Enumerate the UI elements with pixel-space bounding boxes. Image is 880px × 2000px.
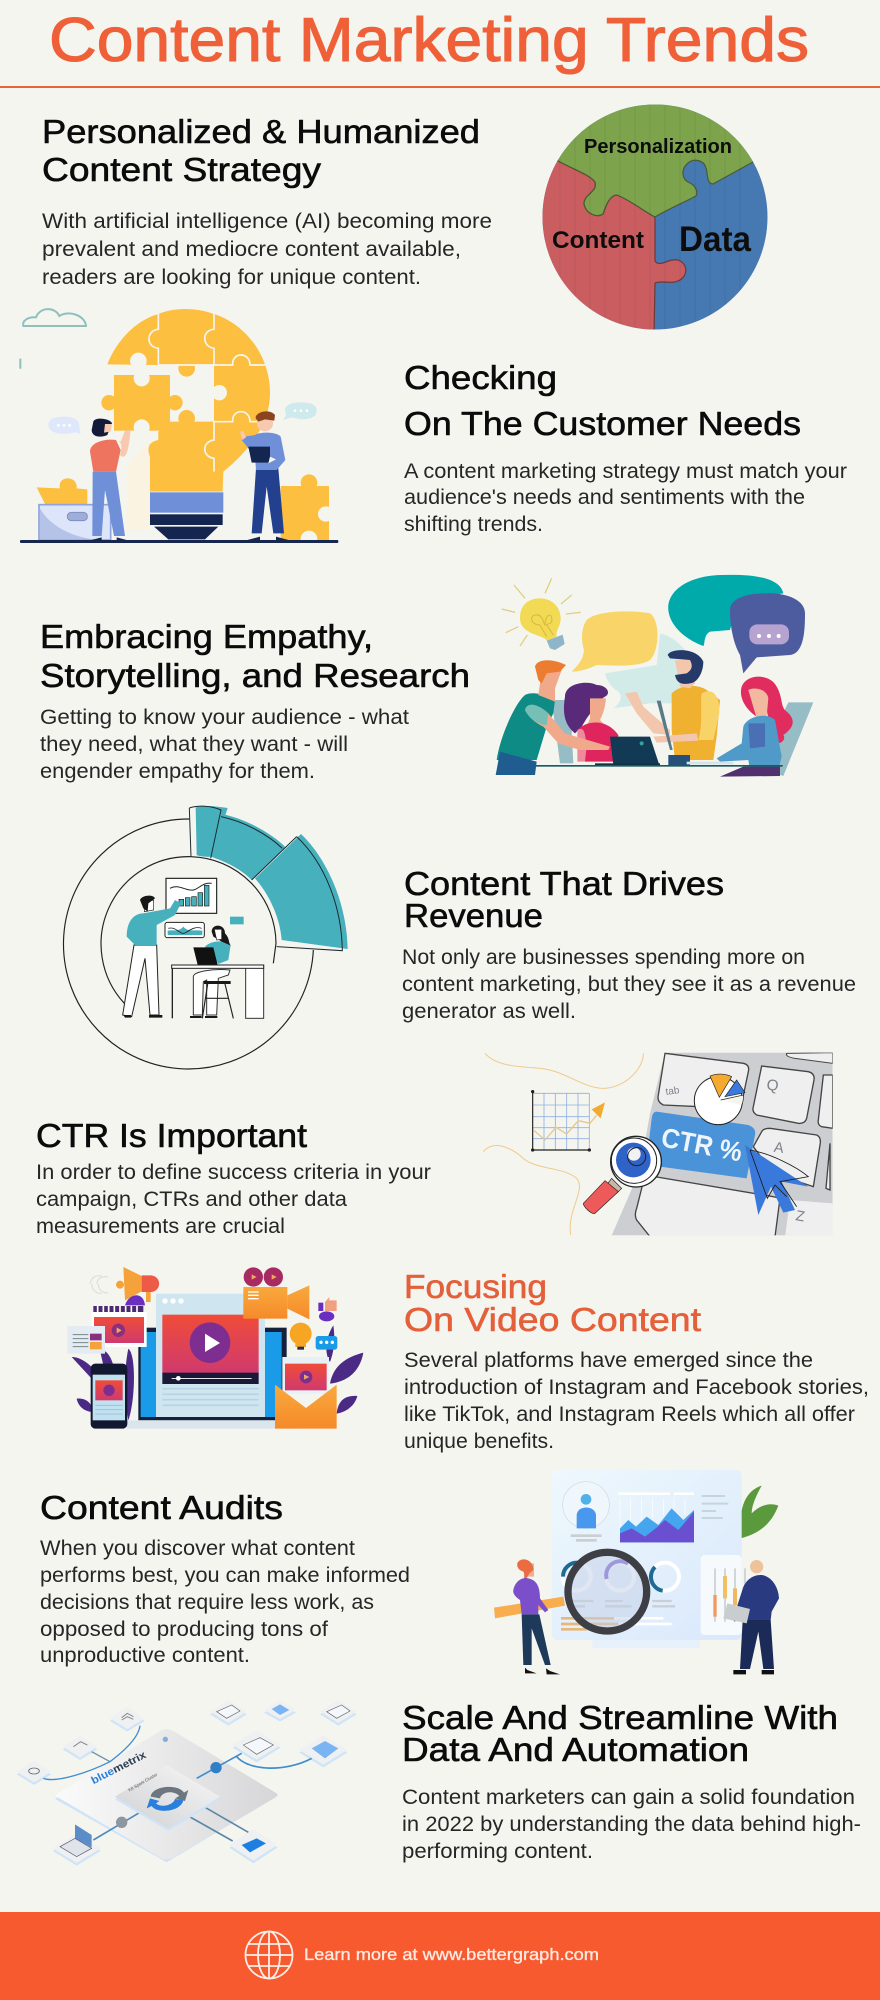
CTR key <box>648 1112 755 1178</box>
list card <box>67 1326 105 1354</box>
cloud <box>23 309 86 326</box>
video window <box>156 1294 265 1417</box>
text block: audits: decisions that require less work, as <box>40 1590 374 1614</box>
label: Personalization: Personalization <box>584 136 732 158</box>
puzzle piece right <box>281 474 333 547</box>
woman <box>513 1559 560 1674</box>
man <box>240 411 291 541</box>
text block: customer needs <box>404 459 847 536</box>
text block: scale: Content marketers can gain a solid foundation <box>402 1785 855 1809</box>
man <box>625 650 720 765</box>
video camera <box>243 1267 309 1319</box>
illustration: radial chart with analysts <box>63 806 348 1069</box>
text block: customer needs: shifting trends. <box>404 512 543 536</box>
box and folder <box>37 478 111 540</box>
illustration: content audit <box>494 1470 779 1674</box>
speech bubble left <box>48 417 81 434</box>
text block: empathy <box>40 705 409 783</box>
heading: revenue <box>404 865 724 934</box>
woman <box>193 926 231 965</box>
heading: empathy: Embracing Empathy, <box>40 618 373 655</box>
heading: CTR: CTR Is Important <box>36 1117 307 1154</box>
text block: empathy: they need, what they want - will <box>40 732 348 756</box>
gears <box>210 1762 222 1773</box>
candle chart <box>701 1555 745 1635</box>
heading: revenue: Content That Drives <box>404 865 724 902</box>
CTR label: CTR % <box>659 1121 745 1167</box>
speech bubble right <box>283 402 317 420</box>
phone <box>91 1364 127 1429</box>
sync logo <box>147 1787 188 1811</box>
chat bubble <box>316 1336 337 1350</box>
woman right <box>717 677 793 777</box>
person 2 <box>564 683 618 762</box>
table edge <box>536 765 783 767</box>
text block: revenue: Not only are businesses spending more on <box>402 945 805 969</box>
key labels: tab <box>665 1085 681 1098</box>
illustration: team discussion <box>496 575 813 777</box>
line chart <box>531 1090 605 1152</box>
heading: customer needs: Checking <box>404 359 557 396</box>
area chart <box>618 1494 728 1542</box>
plant <box>740 1486 778 1538</box>
text block: scale: performing content. <box>402 1839 593 1863</box>
play button <box>190 1322 230 1363</box>
yellow bar <box>494 1597 565 1618</box>
heading: revenue: Revenue <box>404 897 543 934</box>
illustration: CTR keyboard <box>483 1053 833 1237</box>
heading: scale: Data And Automation <box>402 1731 749 1768</box>
keyboard base <box>612 1053 833 1235</box>
text block: video <box>404 1348 869 1453</box>
heading: empathy <box>40 618 470 694</box>
label: Content: Content <box>552 227 644 254</box>
text block: audits: performs best, you can make informed <box>40 1563 410 1587</box>
text block: revenue <box>402 945 856 1023</box>
outer and inner rings <box>63 819 313 1069</box>
text block: scale <box>402 1785 861 1863</box>
pie chart <box>694 1074 745 1125</box>
illustration: data automation network <box>17 1700 357 1866</box>
text block: personalized content: readers are looking for unique content. <box>42 265 421 289</box>
heading: audits: Content Audits <box>40 1489 283 1526</box>
text block: video: like TikTok, and Instagram Reels which all offer <box>404 1402 855 1426</box>
legs and stool <box>190 970 233 1018</box>
teal bubble <box>668 575 783 646</box>
heading: video <box>404 1268 701 1338</box>
pale bubble <box>605 633 697 708</box>
text block: personalized content: prevalent and mediocre content available, <box>42 237 461 261</box>
desk <box>172 965 264 1018</box>
heading: personalized content: Content Strategy <box>42 151 322 188</box>
cube icons <box>29 1704 350 1857</box>
heading: personalized content: Personalized & Humanized <box>42 113 480 150</box>
text block: personalized content <box>42 209 492 289</box>
text block: personalized content: With artificial intelligence (AI) becoming more <box>42 209 492 233</box>
envelope <box>275 1357 337 1429</box>
chip <box>230 917 244 924</box>
key labels <box>665 1076 806 1226</box>
puzzle piece <box>101 370 183 435</box>
orange curves <box>483 1053 643 1235</box>
text block: revenue: generator as well. <box>402 999 576 1023</box>
text block: audits: When you discover what content <box>40 1536 355 1560</box>
text block: CTR <box>36 1160 431 1238</box>
megaphone <box>90 1267 159 1305</box>
heading: personalized content <box>42 113 480 188</box>
yellow bubble <box>572 611 657 672</box>
text block: CTR: measurements are crucial <box>36 1214 285 1238</box>
magnifying glass <box>568 1552 647 1631</box>
text block: CTR: In order to define success criteria in your <box>36 1160 431 1184</box>
keys <box>635 1053 833 1237</box>
profile icon <box>563 1482 609 1542</box>
heading: customer needs: On The Customer Needs <box>404 405 801 442</box>
footer text: Learn more at www.bettergraph.com <box>304 1946 599 1964</box>
table <box>552 700 813 776</box>
text block: video: introduction of Instagram and Facebook stories, <box>404 1375 869 1399</box>
lightbulb <box>502 578 581 650</box>
film card <box>92 1306 147 1347</box>
person 1 <box>496 660 566 775</box>
icon: puzzle circle <box>542 104 768 330</box>
small chart bubble <box>165 922 204 938</box>
thumbs up <box>318 1297 337 1321</box>
small cubes <box>17 1700 357 1866</box>
heading: empathy: Storytelling, and Research <box>40 657 470 694</box>
text block: scale: in 2022 by understanding the data behind high- <box>402 1812 861 1836</box>
bulb base <box>150 492 223 539</box>
magnifier <box>583 1136 661 1214</box>
title: Content Marketing Trends <box>49 6 809 75</box>
cluster label: K8 Spark Cluster <box>127 1772 159 1793</box>
connection lines <box>43 1726 312 1841</box>
key labels: Q <box>765 1076 780 1095</box>
heading: video: Focusing <box>404 1268 547 1305</box>
donuts <box>563 1561 679 1591</box>
purple bubble <box>730 593 805 673</box>
illustration: puzzle light bulb <box>19 309 338 547</box>
footer band <box>0 1912 880 2000</box>
cursor <box>745 1145 808 1215</box>
text block: video: Several platforms have emerged since the <box>404 1348 813 1372</box>
leaves <box>72 1325 363 1420</box>
bulb <box>107 309 270 530</box>
text block: revenue: content marketing, but they see it as a revenue <box>402 972 856 996</box>
label: Data: Data <box>679 220 751 259</box>
icon: globe <box>246 1932 292 1978</box>
text block: empathy: Getting to know your audience - what <box>40 705 409 729</box>
illustration: video marketing <box>67 1267 363 1429</box>
text block: audits <box>40 1536 410 1667</box>
key labels: Z <box>794 1208 806 1226</box>
heading: scale <box>402 1699 838 1768</box>
bluemetrix wordmark: bluemetrix <box>89 1749 148 1787</box>
lightbulb <box>290 1323 312 1350</box>
inner platform <box>115 1765 220 1831</box>
laptop <box>610 737 659 765</box>
card lines <box>572 1601 675 1606</box>
main platform <box>55 1729 278 1862</box>
heading: customer needs <box>404 359 801 442</box>
key labels: A <box>773 1140 785 1157</box>
text block: customer needs: A content marketing strategy must match your <box>404 459 847 483</box>
heading: scale: Scale And Streamline With <box>402 1699 838 1736</box>
ground line <box>20 540 338 543</box>
text block: empathy: engender empathy for them. <box>40 759 315 783</box>
teal segments <box>189 806 348 951</box>
text block: video: unique benefits. <box>404 1429 554 1453</box>
text block: audits: unproductive content. <box>40 1643 250 1667</box>
text block: customer needs: audience's needs and sentiments with the <box>404 485 805 509</box>
chart frame <box>166 878 217 913</box>
man <box>723 1560 779 1674</box>
text block: audits: opposed to producing tons of <box>40 1617 328 1641</box>
dashboard panels <box>552 1470 742 1648</box>
woman <box>89 419 131 541</box>
laptop <box>127 1328 300 1429</box>
pointing arm <box>525 705 610 750</box>
text block: CTR: campaign, CTRs and other data <box>36 1187 347 1211</box>
heading: video: On Video Content <box>404 1301 701 1338</box>
man <box>123 896 181 1018</box>
